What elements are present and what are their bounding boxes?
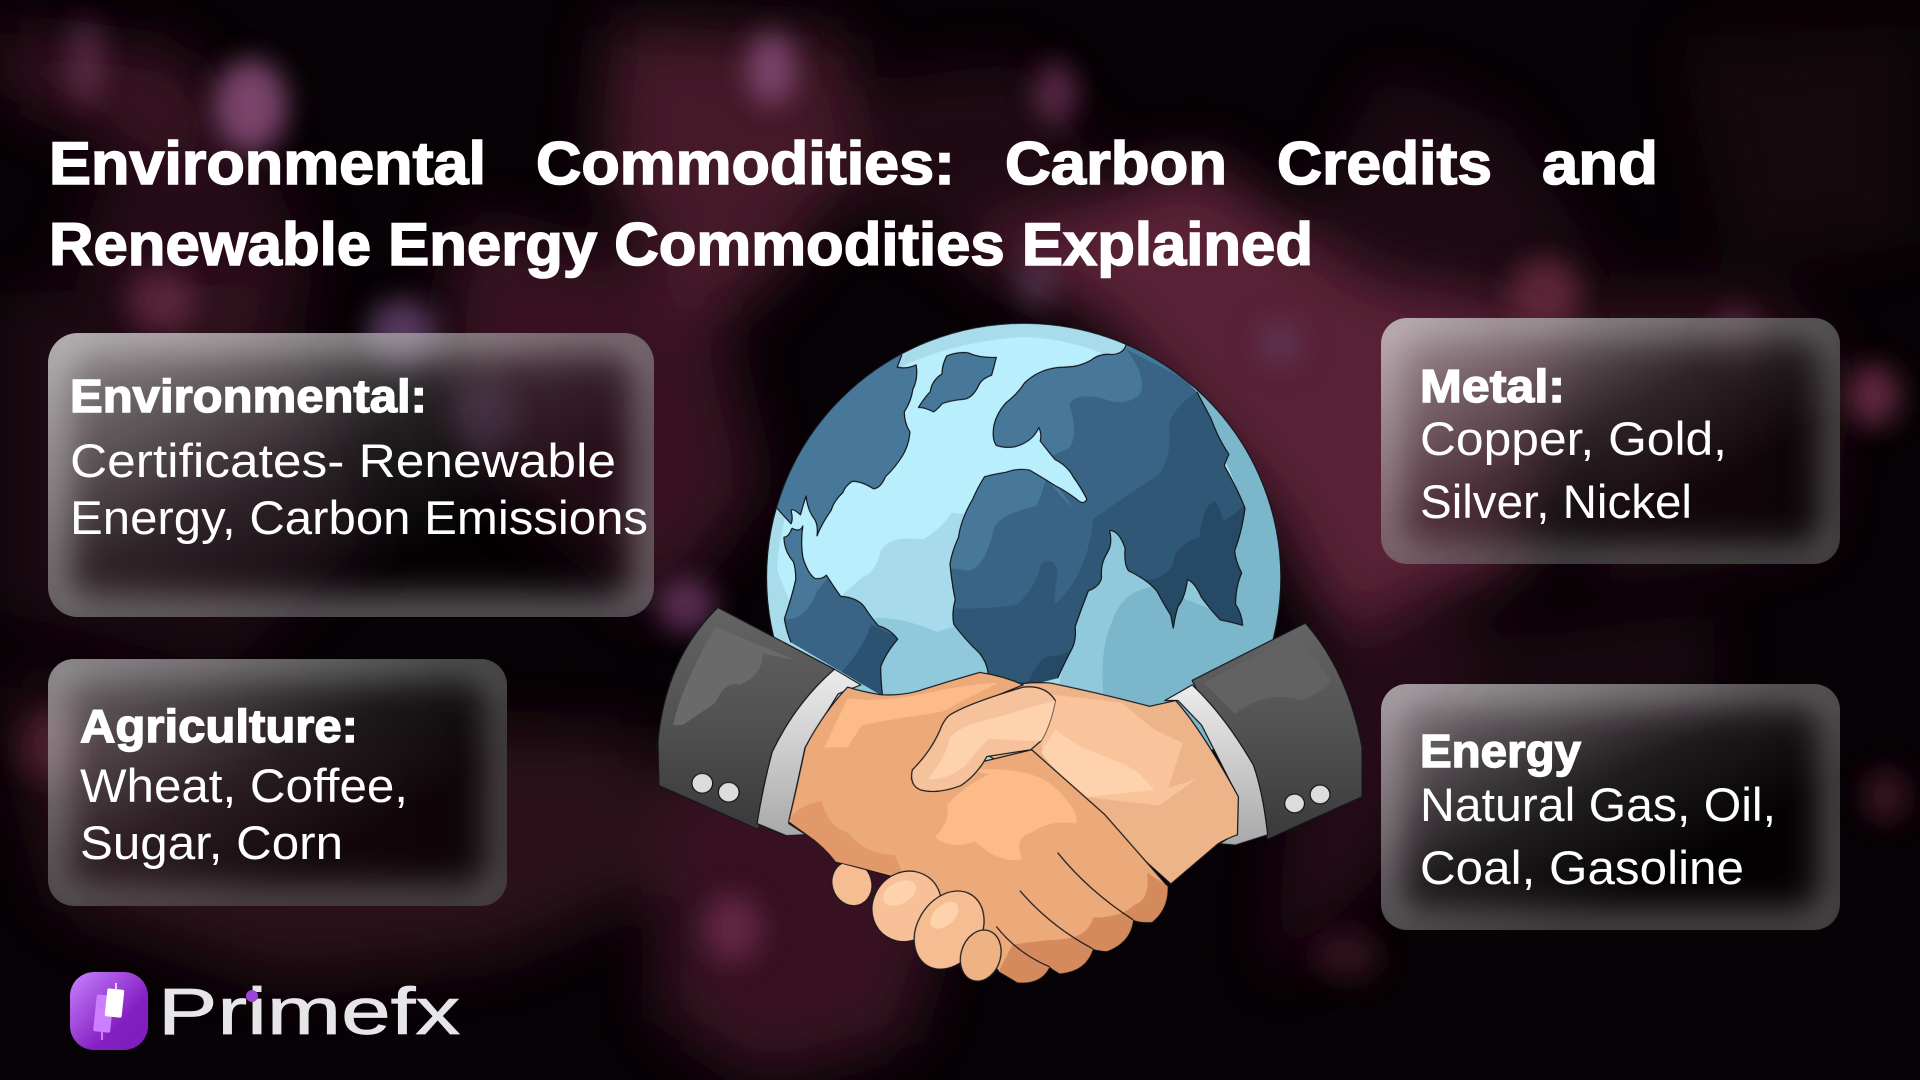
heading: energy: Energy [1420,725,1581,777]
icon: globe [766,323,1282,760]
icon: globe and handshake illustration [658,323,1362,986]
title: Renewable Energy Commodities Explained [49,211,1313,278]
panel: metal [1381,318,1840,564]
heading: environmental: Environmental: [70,370,427,422]
title: and [1542,130,1658,197]
text: metal line 2: Silver, Nickel [1420,475,1692,528]
icon: logo badge [70,972,148,1050]
icon: right sleeve [1192,623,1362,839]
text: energy line 1: Natural Gas, Oil, [1420,778,1776,831]
text: agriculture line 2: Sugar, Corn [80,816,343,869]
text: environmental line 1: Certificates- Renewable [70,434,616,487]
text: agriculture line 1: Wheat, Coffee, [80,759,408,812]
panel: agriculture [48,659,507,906]
title: Credits [1277,130,1492,197]
text: logo wordmark: Primefx [158,974,460,1048]
heading: agriculture: Agriculture: [80,700,358,752]
text: environmental line 2: Energy, Carbon Emissions [70,491,648,544]
panel: energy [1381,684,1840,930]
logo: Primefx [70,972,460,1050]
icon: logo dot on i [246,990,258,1002]
icon: left sleeve [658,607,834,829]
title: Commodities: [536,130,955,197]
panel: environmental [48,333,654,617]
icon: thumb [912,687,1055,792]
icon: fingers [827,857,1008,986]
icon: right hand [942,683,1238,884]
icon: right shirt cuff [1165,685,1268,845]
icon: fingers over hand [860,860,1007,986]
text: energy line 2: Coal, Gasoline [1420,841,1744,894]
text: metal line 1: Copper, Gold, [1420,412,1727,465]
title: Environmental [49,130,486,197]
title [49,130,1658,278]
heading: metal: Metal: [1420,360,1565,412]
icon: left hand [789,672,1168,983]
icon: left shirt cuff [757,669,861,836]
title: Carbon [1005,130,1227,197]
